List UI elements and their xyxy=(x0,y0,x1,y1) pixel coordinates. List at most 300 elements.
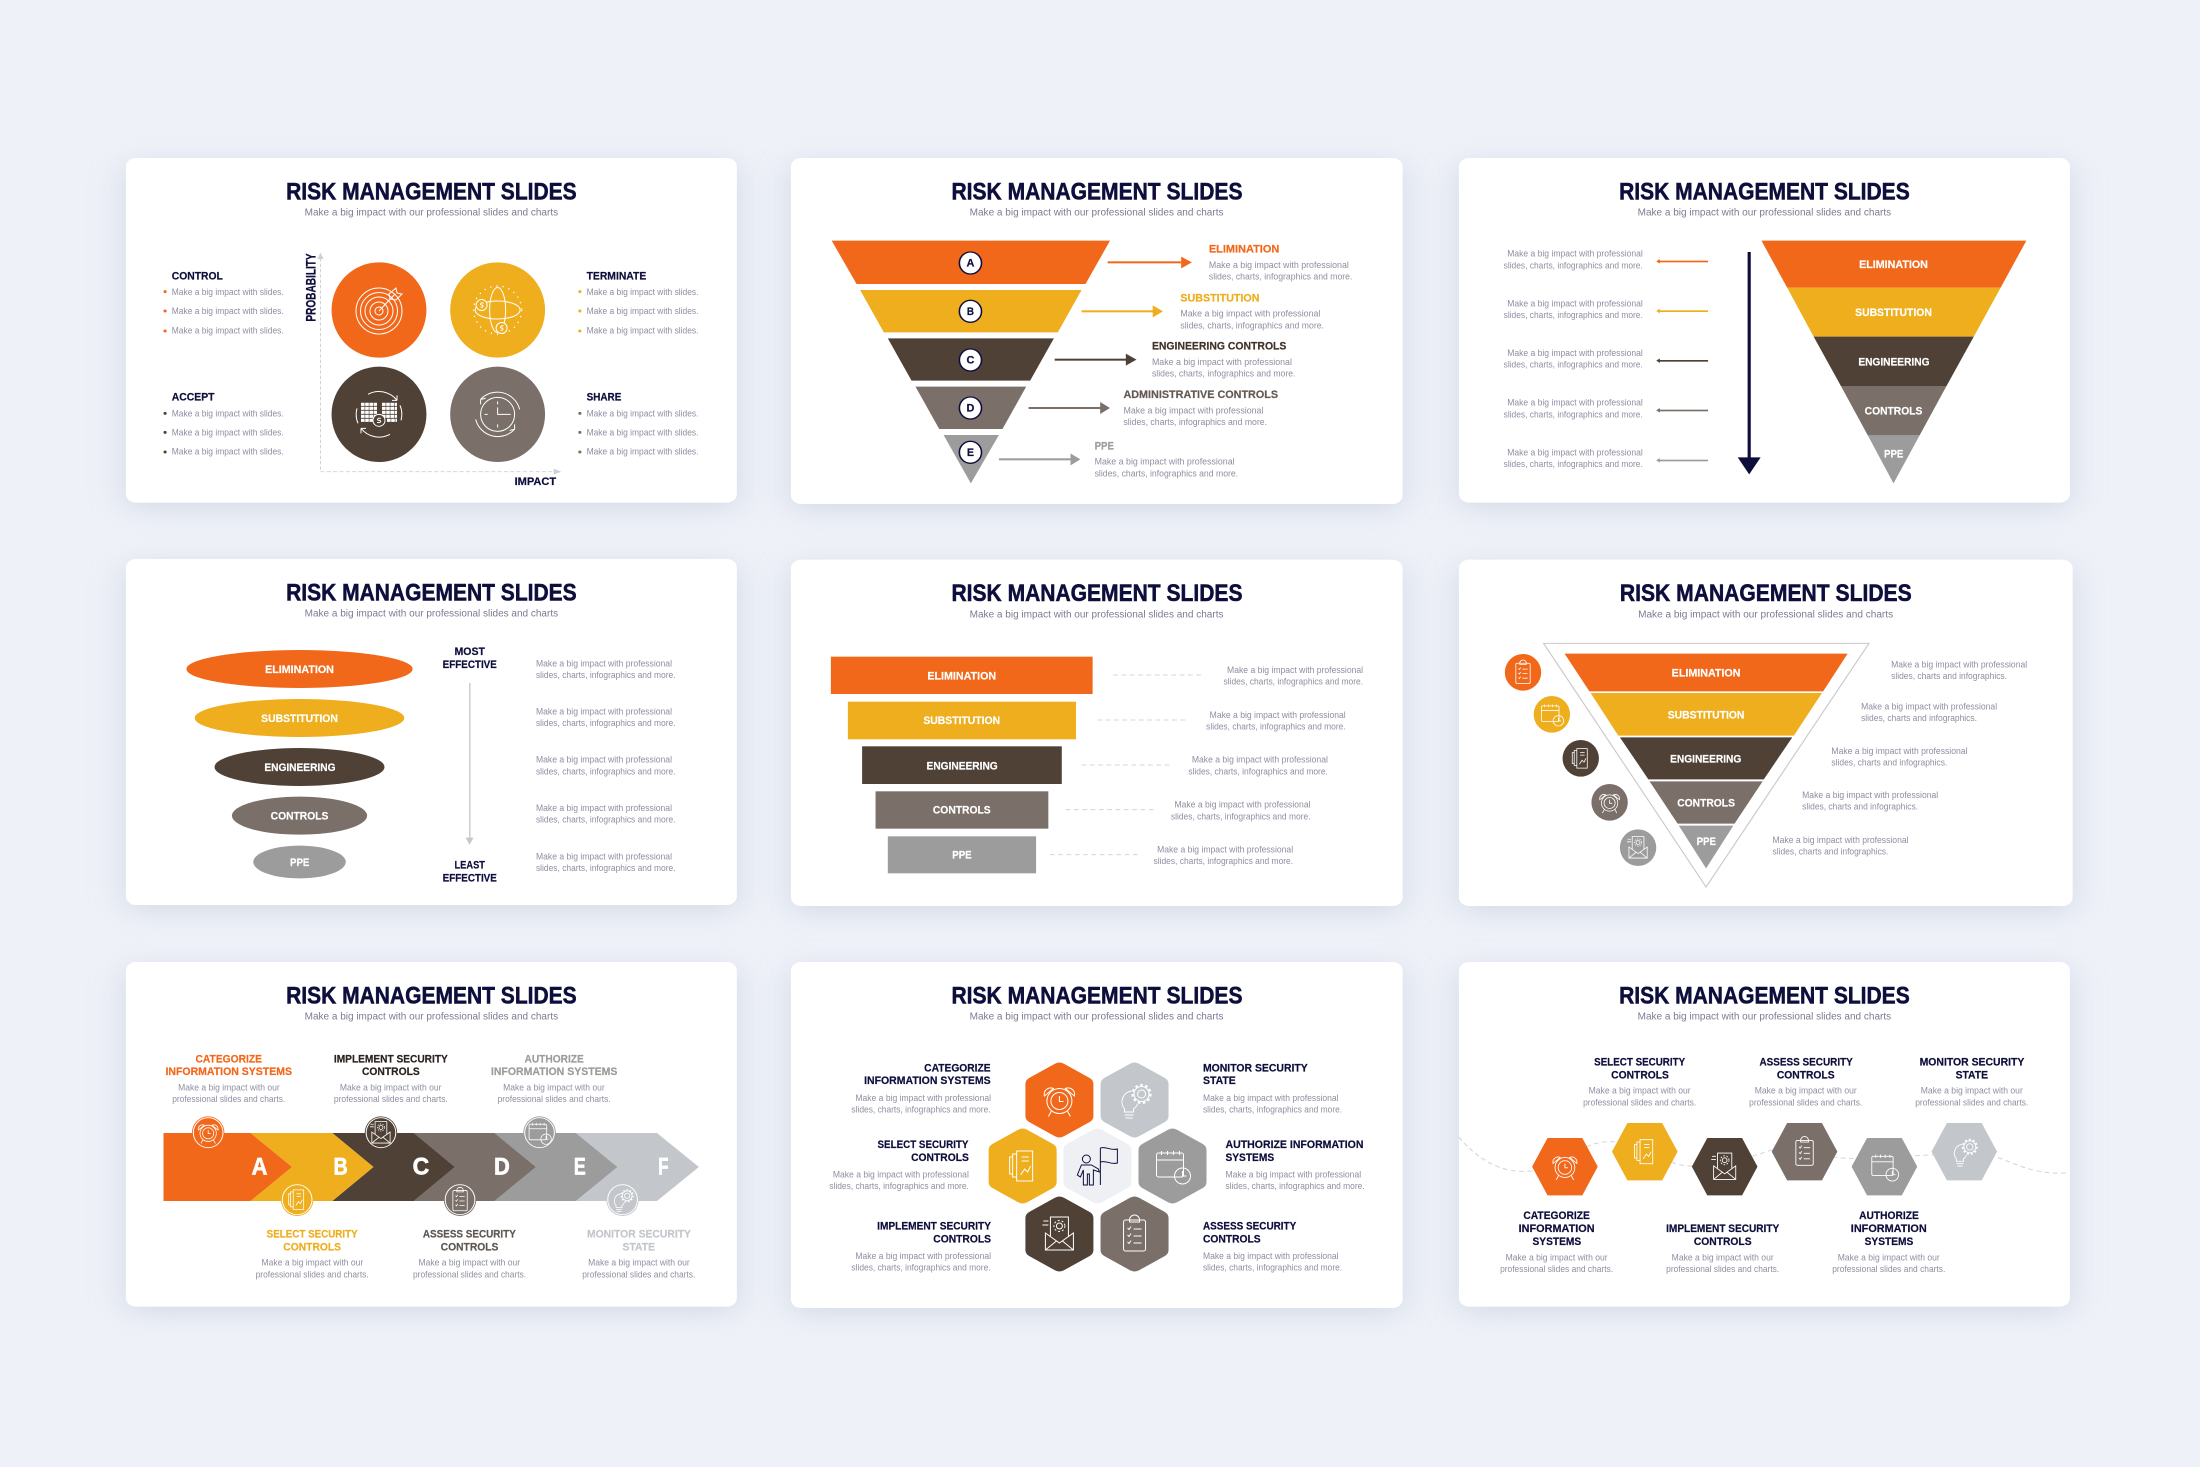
subtitle: Make a big impact with our professional slides and charts xyxy=(1638,207,1892,218)
text block: categorize: CATEGORIZE xyxy=(924,1062,991,1074)
text block: implement: professional slides and charts. xyxy=(334,1095,448,1105)
axes xyxy=(318,254,560,474)
text block: assess: Make a big impact with professional xyxy=(1203,1252,1339,1262)
text block: control xyxy=(163,270,284,336)
chevron E: E xyxy=(574,1152,586,1180)
pyramid level: substitution: SUBSTITUTION xyxy=(1855,306,1932,319)
description 2: Make a big impact with professional xyxy=(536,707,672,717)
text block: assess xyxy=(413,1229,526,1280)
hexagon: envelope xyxy=(1034,1204,1085,1264)
arrow: effectiveness xyxy=(466,683,473,845)
chevron A xyxy=(163,1133,292,1201)
description 4: Make a big impact with professional xyxy=(1507,398,1643,408)
description 5 xyxy=(1504,448,1643,470)
text block: monitor xyxy=(1203,1062,1342,1115)
funnel level A xyxy=(832,241,1110,284)
pyramid level: elimination xyxy=(1761,241,2026,288)
description 2 xyxy=(1504,299,1643,321)
funnel level E xyxy=(944,435,999,483)
text block: engineering controls: slides, charts, infographics and more. xyxy=(1152,369,1295,379)
bar: engineering: ENGINEERING xyxy=(927,759,998,772)
description 2: slides, charts, infographics and more. xyxy=(1504,311,1643,321)
description 4 xyxy=(1171,800,1310,822)
text block: elimination xyxy=(1209,243,1352,282)
description 3 xyxy=(1831,747,1967,768)
text block: ppe: PPE xyxy=(1095,440,1114,452)
panel: inverted pyramid with arrow xyxy=(1459,158,2070,503)
pyramid level: substitution: SUBSTITUTION xyxy=(1668,708,1744,721)
text block: categorize xyxy=(851,1062,991,1115)
title: RISK MANAGEMENT SLIDES xyxy=(951,981,1242,1009)
text block: control: CONTROL xyxy=(172,270,223,282)
text block: engineering controls: ENGINEERING CONTROLS xyxy=(1152,339,1286,352)
text block: select xyxy=(829,1139,969,1192)
panel background xyxy=(791,560,1403,906)
text block: authorize: INFORMATION SYSTEMS xyxy=(491,1066,618,1078)
chevron D: D xyxy=(494,1152,510,1180)
text block: authorize: SYSTEMS xyxy=(1865,1236,1913,1248)
text block: engineering controls: Make a big impact with professional xyxy=(1152,358,1292,368)
text block: authorize: professional slides and charts. xyxy=(1832,1265,1945,1275)
quadrant: terminate xyxy=(450,262,545,358)
hexagon: clipboard xyxy=(1109,1204,1160,1264)
ellipse: controls xyxy=(232,797,367,835)
text block: share: Make a big impact with slides. xyxy=(587,409,698,419)
hexagon: bulb xyxy=(1109,1070,1160,1130)
subtitle: Make a big impact with our professional slides and charts xyxy=(970,1011,1224,1022)
description 5: slides, charts and infographics. xyxy=(1773,847,1888,857)
text block: assess: professional slides and charts. xyxy=(413,1270,526,1280)
description 5: Make a big impact with professional xyxy=(1157,845,1293,855)
pyramid level: elimination: ELIMINATION xyxy=(1672,667,1740,679)
text block: monitor: MONITOR SECURITY xyxy=(1920,1057,2025,1068)
description 4: slides, charts, infographics and more. xyxy=(536,815,676,825)
hexagon: report xyxy=(997,1136,1048,1196)
ellipse: engineering xyxy=(215,748,385,786)
text block: accept: Make a big impact with slides. xyxy=(172,428,284,438)
label: least effective: EFFECTIVE xyxy=(443,871,497,884)
bar: ppe xyxy=(888,836,1036,873)
text block: categorize: CATEGORIZE xyxy=(196,1053,262,1065)
funnel level D: D xyxy=(966,403,974,414)
panel background xyxy=(791,158,1403,504)
hexagon: calendar xyxy=(1147,1136,1198,1196)
text block: monitor: slides, charts, infographics and more. xyxy=(1203,1105,1342,1115)
chevron F xyxy=(576,1133,699,1201)
text block: authorize: SYSTEMS xyxy=(1225,1152,1274,1164)
text block: control: Make a big impact with slides. xyxy=(172,307,284,317)
text block: select: SELECT SECURITY xyxy=(1594,1057,1685,1068)
text block: monitor: professional slides and charts. xyxy=(582,1270,695,1280)
panel: hexagon timeline xyxy=(1459,962,2070,1307)
description 1: slides, charts, infographics and more. xyxy=(1224,677,1363,687)
text block: assess xyxy=(1749,1057,1862,1108)
description 5: Make a big impact with professional xyxy=(1507,448,1643,458)
text block: authorize: slides, charts, infographics and more. xyxy=(1225,1182,1365,1192)
funnel level E: E xyxy=(967,447,974,459)
text block: substitution: SUBSTITUTION xyxy=(1180,292,1259,304)
ellipse: ppe: PPE xyxy=(290,856,309,869)
bar: controls xyxy=(876,791,1048,829)
panel: numbered funnel xyxy=(791,158,1403,504)
description 4: Make a big impact with professional xyxy=(1174,800,1310,810)
hexagon: report xyxy=(1612,1123,1678,1180)
ellipse: elimination xyxy=(186,650,413,688)
text block: authorize xyxy=(1225,1139,1365,1192)
text block: ppe: Make a big impact with professional xyxy=(1095,457,1235,467)
pyramid level: elimination: ELIMINATION xyxy=(1859,258,1928,271)
text block: implement xyxy=(1666,1223,1779,1275)
text block: select: Make a big impact with our xyxy=(1589,1086,1691,1096)
pyramid level: substitution xyxy=(1787,288,2001,337)
description 1 xyxy=(536,659,676,681)
text block: share: Make a big impact with slides. xyxy=(587,447,698,457)
arrow 5 xyxy=(1656,458,1708,463)
text block: monitor xyxy=(582,1229,695,1280)
text block: categorize: slides, charts, infographics and more. xyxy=(851,1105,991,1115)
description 1 xyxy=(1224,666,1363,687)
title: RISK MANAGEMENT SLIDES xyxy=(951,579,1242,606)
description 1: Make a big impact with professional xyxy=(1891,660,2027,670)
quadrant: control xyxy=(332,262,426,358)
label: least effective xyxy=(443,858,497,884)
description 4 xyxy=(536,804,676,825)
text block: implement xyxy=(851,1220,991,1273)
ellipse: controls: CONTROLS xyxy=(271,810,328,822)
text block: accept: Make a big impact with slides. xyxy=(172,409,284,419)
pyramid level: ppe xyxy=(1868,435,1920,483)
panel: risk matrix xyxy=(126,158,737,503)
text block: implement: CONTROLS xyxy=(362,1066,420,1078)
label: least effective: LEAST xyxy=(455,858,485,871)
icon: clipboard xyxy=(1505,654,1541,691)
hexagon: clipboard xyxy=(1772,1123,1837,1180)
description 1: slides, charts, infographics and more. xyxy=(1504,261,1643,271)
description 4: slides, charts and infographics. xyxy=(1802,802,1918,812)
text block: categorize: INFORMATION xyxy=(1519,1223,1595,1235)
arrow A xyxy=(1108,257,1192,268)
text block: categorize: professional slides and charts. xyxy=(1500,1265,1613,1275)
text block: elimination: ELIMINATION xyxy=(1209,243,1279,255)
text block: categorize: CATEGORIZE xyxy=(1523,1210,1590,1222)
description 2: Make a big impact with professional xyxy=(1861,702,1997,712)
text block: assess: slides, charts, infographics and more. xyxy=(1203,1263,1342,1273)
text block: share xyxy=(578,392,698,457)
pyramid level: engineering: ENGINEERING xyxy=(1858,355,1929,368)
text block: assess: CONTROLS xyxy=(1777,1069,1835,1081)
text block: terminate: TERMINATE xyxy=(587,270,646,282)
text block: engineering controls xyxy=(1152,339,1295,379)
panel background xyxy=(1459,962,2070,1307)
subtitle: Make a big impact with our professional slides and charts xyxy=(305,608,559,619)
hexagon: calendar xyxy=(1852,1138,1917,1195)
description 1 xyxy=(1891,660,2027,682)
arrow D xyxy=(1029,402,1110,414)
panel: chevron process xyxy=(126,962,737,1307)
text block: monitor: STATE xyxy=(623,1242,655,1253)
panel: ellipses effectiveness xyxy=(126,559,737,905)
description 3: Make a big impact with professional xyxy=(536,755,672,765)
pyramid level: ppe xyxy=(1679,826,1733,868)
description 4: slides, charts, infographics and more. xyxy=(1171,812,1310,822)
pyramid level: elimination xyxy=(1565,654,1848,691)
text block: authorize: Make a big impact with our xyxy=(503,1083,605,1093)
text block: select: Make a big impact with professional xyxy=(833,1170,969,1180)
subtitle: Make a big impact with our professional slides and charts xyxy=(970,609,1224,620)
bar: elimination xyxy=(831,657,1093,694)
text block: assess: ASSESS SECURITY xyxy=(1759,1057,1853,1068)
text block: substitution xyxy=(1180,292,1324,331)
text block: categorize xyxy=(165,1053,292,1105)
arrow 4 xyxy=(1656,408,1708,413)
text block: implement: professional slides and charts. xyxy=(1666,1265,1779,1275)
axis label: impact: IMPACT xyxy=(515,476,557,488)
text block: select: SELECT SECURITY xyxy=(267,1229,358,1240)
dashed connectors xyxy=(1050,675,1202,855)
text block: monitor xyxy=(1915,1057,2028,1108)
description 3: slides, charts and infographics. xyxy=(1831,758,1947,768)
description 5 xyxy=(1154,845,1293,867)
description 5: Make a big impact with professional xyxy=(536,852,672,862)
text block: authorize: professional slides and charts. xyxy=(498,1095,611,1105)
description 2: slides, charts, infographics and more. xyxy=(536,719,676,729)
panel background xyxy=(126,962,737,1307)
arrow 3 xyxy=(1656,358,1708,363)
text block: terminate: Make a big impact with slides. xyxy=(587,326,698,336)
text block: categorize: Make a big impact with professional xyxy=(855,1094,991,1104)
text block: assess: Make a big impact with our xyxy=(1755,1086,1857,1096)
panel background xyxy=(1459,158,2070,503)
chevron F: F xyxy=(658,1152,668,1180)
text block: share: SHARE xyxy=(587,392,622,403)
bar: substitution: SUBSTITUTION xyxy=(923,714,1000,727)
funnel level C: C xyxy=(966,355,975,366)
text block: accept: Make a big impact with slides. xyxy=(172,447,284,457)
text block: authorize: Make a big impact with professional xyxy=(1225,1170,1361,1180)
text block: accept xyxy=(163,392,284,457)
hexagon: person with flag xyxy=(1072,1136,1123,1196)
text block: categorize: SYSTEMS xyxy=(1533,1236,1581,1248)
subtitle: Make a big impact with our professional slides and charts xyxy=(1638,1011,1892,1022)
chevron C: C xyxy=(413,1152,429,1180)
arrow 1 xyxy=(1656,259,1708,264)
text block: terminate: Make a big impact with slides. xyxy=(587,307,698,317)
description 1: Make a big impact with professional xyxy=(536,659,672,669)
description 4: Make a big impact with professional xyxy=(536,804,672,814)
text block: implement: IMPLEMENT SECURITY xyxy=(334,1053,448,1065)
text block: elimination: slides, charts, infographics and more. xyxy=(1209,272,1352,282)
text block: authorize: AUTHORIZE INFORMATION xyxy=(1225,1139,1363,1151)
subtitle: Make a big impact with our professional slides and charts xyxy=(305,1011,559,1022)
text block: monitor: Make a big impact with our xyxy=(1921,1086,2023,1096)
text block: select xyxy=(256,1229,369,1280)
text block: terminate: Make a big impact with slides. xyxy=(587,288,698,298)
hexagon: bulb xyxy=(1931,1123,1997,1180)
description 4 xyxy=(1504,398,1643,420)
description 5 xyxy=(536,852,676,874)
subtitle: Make a big impact with our professional slides and charts xyxy=(970,207,1224,218)
text block: implement xyxy=(334,1053,448,1105)
description 2: Make a big impact with professional xyxy=(1210,711,1346,721)
icon: calendar xyxy=(523,1116,556,1149)
arrow 2 xyxy=(1656,309,1708,313)
ellipse: engineering: ENGINEERING xyxy=(264,761,335,774)
text block: ppe xyxy=(1095,440,1238,479)
text block: select: slides, charts, infographics and more. xyxy=(829,1182,969,1192)
description 1: Make a big impact with professional xyxy=(1507,249,1643,259)
text block: authorize: Make a big impact with our xyxy=(1838,1253,1940,1263)
pyramid level: controls xyxy=(1841,386,1946,435)
description 5: slides, charts, infographics and more. xyxy=(536,864,676,874)
description 1 xyxy=(1504,249,1643,271)
chevron D xyxy=(414,1133,536,1201)
label: most effective: EFFECTIVE xyxy=(443,658,497,671)
description 3 xyxy=(1504,349,1643,370)
axis label: probability: PROBABILITY xyxy=(302,253,319,322)
text block: categorize: professional slides and charts. xyxy=(172,1095,285,1105)
text block: administrative controls: slides, charts, infographics and more. xyxy=(1123,418,1267,428)
funnel level A: A xyxy=(966,258,975,269)
pyramid level: engineering xyxy=(1620,737,1792,779)
text block: implement: Make a big impact with our xyxy=(1672,1253,1774,1263)
text block: monitor: professional slides and charts. xyxy=(1915,1098,2028,1108)
text block: implement: Make a big impact with our xyxy=(340,1083,442,1093)
text block: categorize xyxy=(1500,1210,1613,1275)
hexagon: alarm clock xyxy=(1034,1070,1085,1130)
description 5: Make a big impact with professional xyxy=(1773,836,1909,846)
hexagon: alarm clock xyxy=(1532,1138,1598,1195)
text block: administrative controls xyxy=(1123,388,1278,428)
text block: monitor: STATE xyxy=(1956,1069,1988,1081)
ellipse: substitution xyxy=(195,699,404,737)
funnel level D xyxy=(915,387,1026,429)
icon: alarm clock xyxy=(192,1116,224,1149)
panel background xyxy=(791,962,1403,1308)
big down arrow xyxy=(1738,252,1761,474)
pyramid level: controls: CONTROLS xyxy=(1677,797,1735,809)
text block: implement: IMPLEMENT SECURITY xyxy=(877,1220,991,1232)
text block: substitution: slides, charts, infographics and more. xyxy=(1180,321,1324,331)
text block: administrative controls: ADMINISTRATIVE CONTROLS xyxy=(1123,388,1278,401)
quadrant: accept xyxy=(332,367,426,462)
text block: accept: ACCEPT xyxy=(172,392,215,403)
icon: bulb xyxy=(606,1183,639,1216)
text block: categorize: INFORMATION SYSTEMS xyxy=(864,1075,991,1087)
text block: control: Make a big impact with slides. xyxy=(172,288,284,298)
funnel level B: B xyxy=(967,306,974,318)
text block: monitor: MONITOR SECURITY xyxy=(587,1229,691,1240)
pyramid level: controls: CONTROLS xyxy=(1865,405,1922,417)
icon: calendar xyxy=(1534,696,1570,733)
icon: envelope xyxy=(1620,829,1656,866)
pyramid level: engineering xyxy=(1814,337,1974,386)
bar: controls: CONTROLS xyxy=(933,804,991,816)
pyramid level: substitution xyxy=(1591,693,1822,736)
pyramid level: controls xyxy=(1650,781,1763,824)
text block: select: CONTROLS xyxy=(1611,1069,1669,1081)
description 1: Make a big impact with professional xyxy=(1227,666,1363,676)
description 5 xyxy=(1773,836,1909,857)
text block: implement: IMPLEMENT SECURITY xyxy=(1666,1223,1779,1235)
label: most effective xyxy=(443,645,497,671)
bar: substitution xyxy=(848,702,1076,739)
description 2 xyxy=(1206,711,1346,732)
icon: alarm clock xyxy=(1591,784,1628,821)
title: RISK MANAGEMENT SLIDES xyxy=(1619,177,1910,205)
icon: report xyxy=(281,1183,313,1216)
bar: engineering xyxy=(862,746,1062,784)
description 3: Make a big impact with professional xyxy=(1192,755,1328,765)
funnel level C xyxy=(888,338,1054,381)
text block: assess xyxy=(1203,1220,1342,1273)
hexagon: envelope xyxy=(1692,1138,1757,1195)
description 1: slides, charts and infographics. xyxy=(1891,672,2007,682)
text block: select: professional slides and charts. xyxy=(256,1270,369,1280)
text block: categorize: INFORMATION SYSTEMS xyxy=(165,1066,292,1078)
description 5: slides, charts, infographics and more. xyxy=(1154,857,1293,867)
text block: control: Make a big impact with slides. xyxy=(172,326,284,336)
description 2: Make a big impact with professional xyxy=(1507,299,1643,309)
text block: select: CONTROLS xyxy=(911,1152,969,1164)
text block: authorize: AUTHORIZE xyxy=(1859,1210,1919,1222)
text block: assess: ASSESS SECURITY xyxy=(1203,1220,1296,1232)
text block: administrative controls: Make a big impact with professional xyxy=(1123,406,1263,416)
text block: implement: Make a big impact with professional xyxy=(855,1252,991,1262)
bar: elimination: ELIMINATION xyxy=(927,669,996,682)
arrow E xyxy=(999,453,1080,465)
text block: assess: Make a big impact with our xyxy=(419,1258,521,1268)
text block: ppe: slides, charts, infographics and more. xyxy=(1095,469,1238,479)
arrow C xyxy=(1055,354,1137,366)
description 2: slides, charts, infographics and more. xyxy=(1206,722,1346,732)
text block: implement: CONTROLS xyxy=(933,1233,991,1245)
description 2 xyxy=(1861,702,1997,724)
text block: select: SELECT SECURITY xyxy=(878,1139,969,1151)
chevron A: A xyxy=(252,1152,267,1180)
title: RISK MANAGEMENT SLIDES xyxy=(1620,579,1912,606)
description 3: Make a big impact with professional xyxy=(1507,349,1643,359)
text block: authorize xyxy=(491,1053,618,1105)
panel background xyxy=(126,559,737,905)
subtitle: Make a big impact with our professional slides and charts xyxy=(305,207,559,218)
description 3: slides, charts, infographics and more. xyxy=(536,767,676,777)
chevron B: B xyxy=(334,1152,348,1180)
title: RISK MANAGEMENT SLIDES xyxy=(286,578,577,606)
text block: categorize: Make a big impact with our xyxy=(178,1083,280,1093)
description 3 xyxy=(536,755,676,777)
text block: select: CONTROLS xyxy=(283,1242,341,1253)
text block: assess: CONTROLS xyxy=(1203,1233,1261,1245)
icon: envelope xyxy=(365,1116,397,1149)
text block: implement: CONTROLS xyxy=(1694,1236,1752,1248)
text block: monitor: Make a big impact with our xyxy=(588,1258,690,1268)
description 5: slides, charts, infographics and more. xyxy=(1504,460,1643,470)
text block: monitor: STATE xyxy=(1203,1075,1236,1087)
text block: substitution: Make a big impact with professional xyxy=(1180,309,1320,319)
description 1: slides, charts, infographics and more. xyxy=(536,671,676,681)
description 4 xyxy=(1802,791,1938,812)
funnel level B xyxy=(860,290,1082,332)
quadrant: share xyxy=(450,367,545,462)
dashed wave xyxy=(1459,1137,2068,1173)
title: RISK MANAGEMENT SLIDES xyxy=(951,177,1242,205)
description 3: slides, charts, infographics and more. xyxy=(1188,767,1328,777)
chevron B xyxy=(250,1133,373,1201)
ellipse: ppe xyxy=(253,846,346,878)
label: most effective: MOST xyxy=(455,645,486,658)
pyramid outline xyxy=(1544,643,1869,887)
text block: assess: ASSESS SECURITY xyxy=(423,1229,516,1240)
